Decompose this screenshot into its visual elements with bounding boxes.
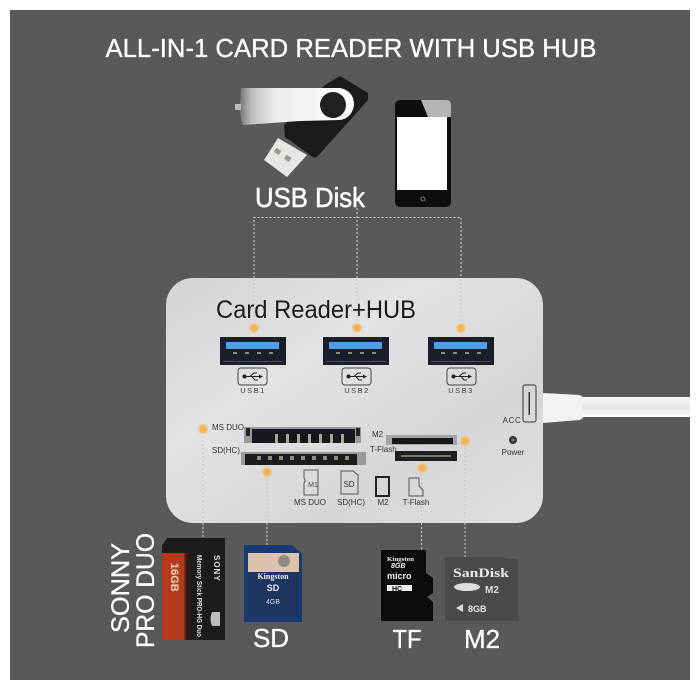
usb labels: USB1 xyxy=(240,386,266,395)
slot labels: T-Flash xyxy=(370,445,397,454)
power indicator: Power xyxy=(502,448,525,457)
card: sd xyxy=(244,545,302,622)
label: sd: SD xyxy=(253,623,289,653)
acc switch xyxy=(503,385,536,425)
connector lines: cards, lower xyxy=(203,523,465,557)
power indicator xyxy=(502,436,525,457)
sd slot xyxy=(241,452,366,465)
acc switch: ACC xyxy=(503,416,521,425)
usb symbol 2 xyxy=(342,368,371,385)
connector lines: cards, on device xyxy=(203,436,465,523)
card: memory stick pro duo: 16GB xyxy=(168,563,180,592)
usb port 3 xyxy=(428,337,494,365)
label: sonny pro duo xyxy=(107,533,160,648)
card: m2 sandisk xyxy=(445,557,518,621)
slot labels: MS DUO xyxy=(212,423,244,432)
indicator dots: slots xyxy=(197,423,471,478)
card: micro sd: 8GB xyxy=(391,563,405,570)
label: tf: TF xyxy=(392,624,422,654)
card type labels: M2 xyxy=(377,498,389,507)
card: m2 sandisk: M2 xyxy=(485,585,499,596)
slot labels xyxy=(212,423,397,455)
card: memory stick pro duo: SONY xyxy=(212,555,221,582)
card type labels xyxy=(294,498,429,507)
icon: smartphone xyxy=(395,100,451,207)
card: memory stick pro duo: Memory Stick PRO-HG Duo xyxy=(195,555,204,637)
heading: card reader hub: Card Reader+HUB xyxy=(216,296,416,324)
indicator dots: usb xyxy=(248,322,467,334)
icon: usb flash drive xyxy=(235,76,368,177)
m2 slot xyxy=(386,435,457,445)
card type labels: SD(HC) xyxy=(337,498,365,507)
card: sd: 4GB xyxy=(266,599,280,606)
usb labels: USB2 xyxy=(344,386,370,395)
usb symbol 3 xyxy=(447,368,476,385)
t-flash slot xyxy=(395,451,457,461)
card: sd: Kingston xyxy=(257,572,289,581)
title: ALL-IN-1 CARD READER WITH USB HUB xyxy=(106,33,596,63)
connector lines: usb, upper xyxy=(254,208,461,278)
label: sonny pro duo: PRO DUO xyxy=(132,533,160,648)
label: USB Disk: USB Disk xyxy=(255,182,366,213)
slot labels: SD(HC) xyxy=(212,446,240,455)
card: m2 sandisk: 8GB xyxy=(468,604,487,614)
card: sd: SD xyxy=(267,583,280,593)
card type icons: SD xyxy=(343,480,355,489)
card: micro sd: HC xyxy=(392,586,402,593)
usb labels xyxy=(240,386,474,395)
card: micro sd: Kingston xyxy=(387,556,414,563)
card: micro sd: micro xyxy=(387,571,412,581)
usb symbol 1 xyxy=(238,368,267,385)
slot labels: M2 xyxy=(372,430,384,439)
usb labels: USB3 xyxy=(448,386,474,395)
card: memory stick pro duo xyxy=(162,538,225,640)
panel: card reader hub xyxy=(166,278,543,523)
label: sonny pro duo: SONNY xyxy=(107,543,135,633)
ms duo slot xyxy=(244,427,361,443)
card: micro sd xyxy=(381,550,433,621)
label: m2: M2 xyxy=(464,624,500,654)
usb port 2 xyxy=(323,337,389,365)
card type icons: M1 xyxy=(308,482,318,489)
cable xyxy=(543,393,690,423)
card type labels: T-Flash xyxy=(403,498,429,507)
usb port 1 xyxy=(220,337,286,365)
card: m2 sandisk: SanDisk xyxy=(453,566,509,580)
connector lines: usb, on device xyxy=(254,279,461,322)
card type labels: MS DUO xyxy=(294,498,326,507)
card type icons xyxy=(304,470,423,496)
